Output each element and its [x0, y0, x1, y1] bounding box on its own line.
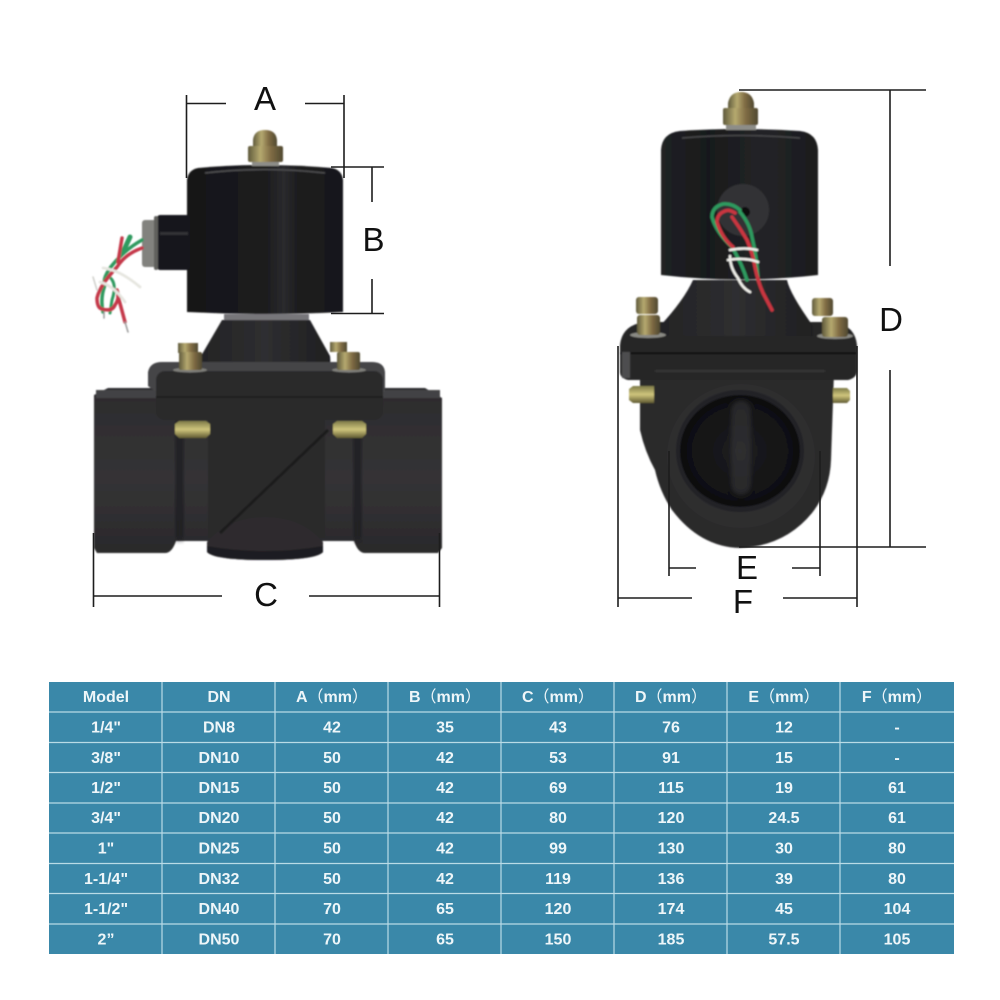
- valve body: [640, 372, 834, 548]
- row 3/4 inch: 80: [549, 810, 567, 827]
- row 1-1/2 inch: 1-1/2": [84, 901, 128, 918]
- top nut: [248, 130, 283, 166]
- row 1-1/2 inch: 70: [323, 901, 341, 918]
- header row: E（mm）: [748, 688, 820, 706]
- wires: [93, 237, 142, 332]
- coil: [187, 165, 343, 314]
- row 1 inch: DN25: [199, 840, 240, 858]
- row 1/2 inch: 61: [888, 780, 906, 797]
- dimension F: F: [733, 583, 753, 620]
- row 3/4 inch: [91, 810, 906, 827]
- header row: D（mm）: [635, 688, 707, 706]
- row 3/4 inch: 24.5: [768, 810, 800, 827]
- dimension A: [186, 80, 344, 178]
- dimension F: [618, 346, 857, 620]
- row 2 inch: 70: [323, 932, 341, 948]
- row 1-1/2 inch: [84, 901, 910, 918]
- left valve photo: [93, 130, 442, 560]
- dimension E: [669, 451, 820, 586]
- row 1-1/2 inch: DN40: [199, 901, 240, 918]
- row 2 inch: 150: [545, 932, 571, 948]
- row 1-1/4 inch: 50: [323, 871, 341, 888]
- row 1-1/2 inch: 174: [658, 901, 684, 918]
- top nut: [723, 92, 758, 130]
- row 1-1/2 inch: 104: [884, 901, 910, 918]
- row 1-1/4 inch: 42: [436, 871, 454, 888]
- row 1 inch: 99: [549, 840, 567, 858]
- row 3/4 inch: 50: [323, 810, 341, 827]
- row 3/4 inch: DN20: [199, 810, 240, 827]
- row 3/8 inch: [91, 750, 900, 767]
- row 1 inch: 50: [323, 840, 341, 858]
- header row: [83, 688, 932, 706]
- row 1/4 inch: [91, 720, 900, 736]
- row 1/4 inch: -: [894, 720, 900, 736]
- row 1 inch: 30: [775, 840, 793, 858]
- row 3/8 inch: 91: [662, 750, 680, 767]
- inlet and outlet pipes: [94, 388, 442, 553]
- row 1-1/4 inch: 39: [775, 871, 793, 888]
- row 1-1/4 inch: 136: [658, 871, 684, 888]
- row 1/2 inch: [91, 780, 906, 797]
- dimension D: [739, 90, 926, 547]
- row 3/8 inch: 53: [549, 750, 567, 767]
- dimension D: D: [879, 301, 903, 338]
- row 1/4 inch: DN8: [203, 720, 235, 736]
- row 2 inch: DN50: [199, 932, 240, 948]
- dimension B: [331, 167, 385, 314]
- row 3/4 inch: 61: [888, 810, 906, 827]
- row 1/4 inch: 12: [775, 720, 793, 736]
- header row: DN: [207, 689, 231, 706]
- dimension A: A: [254, 80, 276, 117]
- header row: B（mm）: [409, 688, 481, 706]
- row 1/4 inch: 1/4": [91, 720, 121, 736]
- header row: A（mm）: [296, 688, 368, 706]
- row 1-1/2 inch: 120: [545, 901, 571, 918]
- row 3/8 inch: 42: [436, 750, 454, 767]
- row 3/8 inch: 50: [323, 750, 341, 767]
- coil top highlight: [682, 136, 800, 138]
- row 1/2 inch: 115: [658, 780, 684, 797]
- row 3/8 inch: 15: [775, 750, 793, 767]
- pipe opening: [667, 384, 815, 528]
- row 2 inch: 57.5: [768, 932, 800, 948]
- flange bolts: [629, 297, 853, 403]
- row 1/4 inch: 35: [436, 720, 454, 736]
- row 1/2 inch: 19: [775, 780, 793, 797]
- row 2 inch: 105: [884, 932, 910, 948]
- row 1-1/4 inch: 1-1/4": [84, 871, 128, 888]
- row 2 inch: 185: [658, 932, 684, 948]
- row 1/2 inch: 50: [323, 780, 341, 797]
- silver ring under coil: [224, 314, 309, 320]
- row 1/2 inch: 1/2": [91, 780, 121, 797]
- side wire connector: [142, 215, 190, 270]
- row 1-1/2 inch: 65: [436, 901, 454, 918]
- row 1/2 inch: 69: [549, 780, 567, 797]
- row 1/4 inch: 76: [662, 720, 680, 736]
- row 3/4 inch: 3/4": [91, 810, 121, 827]
- flange: [148, 362, 385, 420]
- row 3/8 inch: -: [894, 750, 900, 767]
- bottom port: [207, 517, 323, 560]
- row 2 inch: 2”: [98, 932, 114, 948]
- dimension C: C: [254, 576, 278, 613]
- dimension B: B: [362, 221, 385, 258]
- cone neck: [660, 280, 813, 336]
- coil: [661, 129, 818, 280]
- row 2 inch: [98, 932, 910, 948]
- row 1 inch: [98, 840, 906, 858]
- row 1-1/4 inch: DN32: [199, 871, 240, 888]
- row 3/8 inch: 3/8": [91, 750, 121, 767]
- flange: [620, 322, 857, 380]
- row 1 inch: 130: [658, 840, 684, 858]
- dimension C: [93, 533, 440, 613]
- row 3/4 inch: 42: [436, 810, 454, 827]
- row 1/2 inch: 42: [436, 780, 454, 797]
- specification table: [49, 682, 954, 954]
- wires: [712, 204, 772, 310]
- header row: Model: [83, 689, 129, 706]
- dimension E: E: [736, 549, 758, 586]
- diagonal body seam: [220, 430, 328, 533]
- row 3/8 inch: DN10: [199, 750, 240, 767]
- row 3/4 inch: 120: [658, 810, 684, 827]
- row 1 inch: 80: [888, 840, 906, 858]
- row 1/2 inch: DN15: [199, 780, 240, 797]
- coil top highlight: [205, 170, 325, 173]
- row 1 inch: 42: [436, 840, 454, 858]
- wire grommet: [717, 184, 769, 236]
- flange bolts: [173, 342, 366, 438]
- row 1-1/4 inch: 80: [888, 871, 906, 888]
- row 1-1/4 inch: 119: [545, 871, 571, 888]
- row 2 inch: 65: [436, 932, 454, 948]
- header row: C（mm）: [522, 688, 594, 706]
- row 1-1/2 inch: 45: [775, 901, 793, 918]
- row 1 inch: 1": [98, 840, 114, 858]
- row 1-1/4 inch: [84, 871, 906, 888]
- header row: F（mm）: [862, 688, 932, 706]
- right valve photo: [620, 92, 857, 548]
- row 1/4 inch: 43: [549, 720, 567, 736]
- row 1/4 inch: 42: [323, 720, 341, 736]
- cone neck: [200, 320, 330, 372]
